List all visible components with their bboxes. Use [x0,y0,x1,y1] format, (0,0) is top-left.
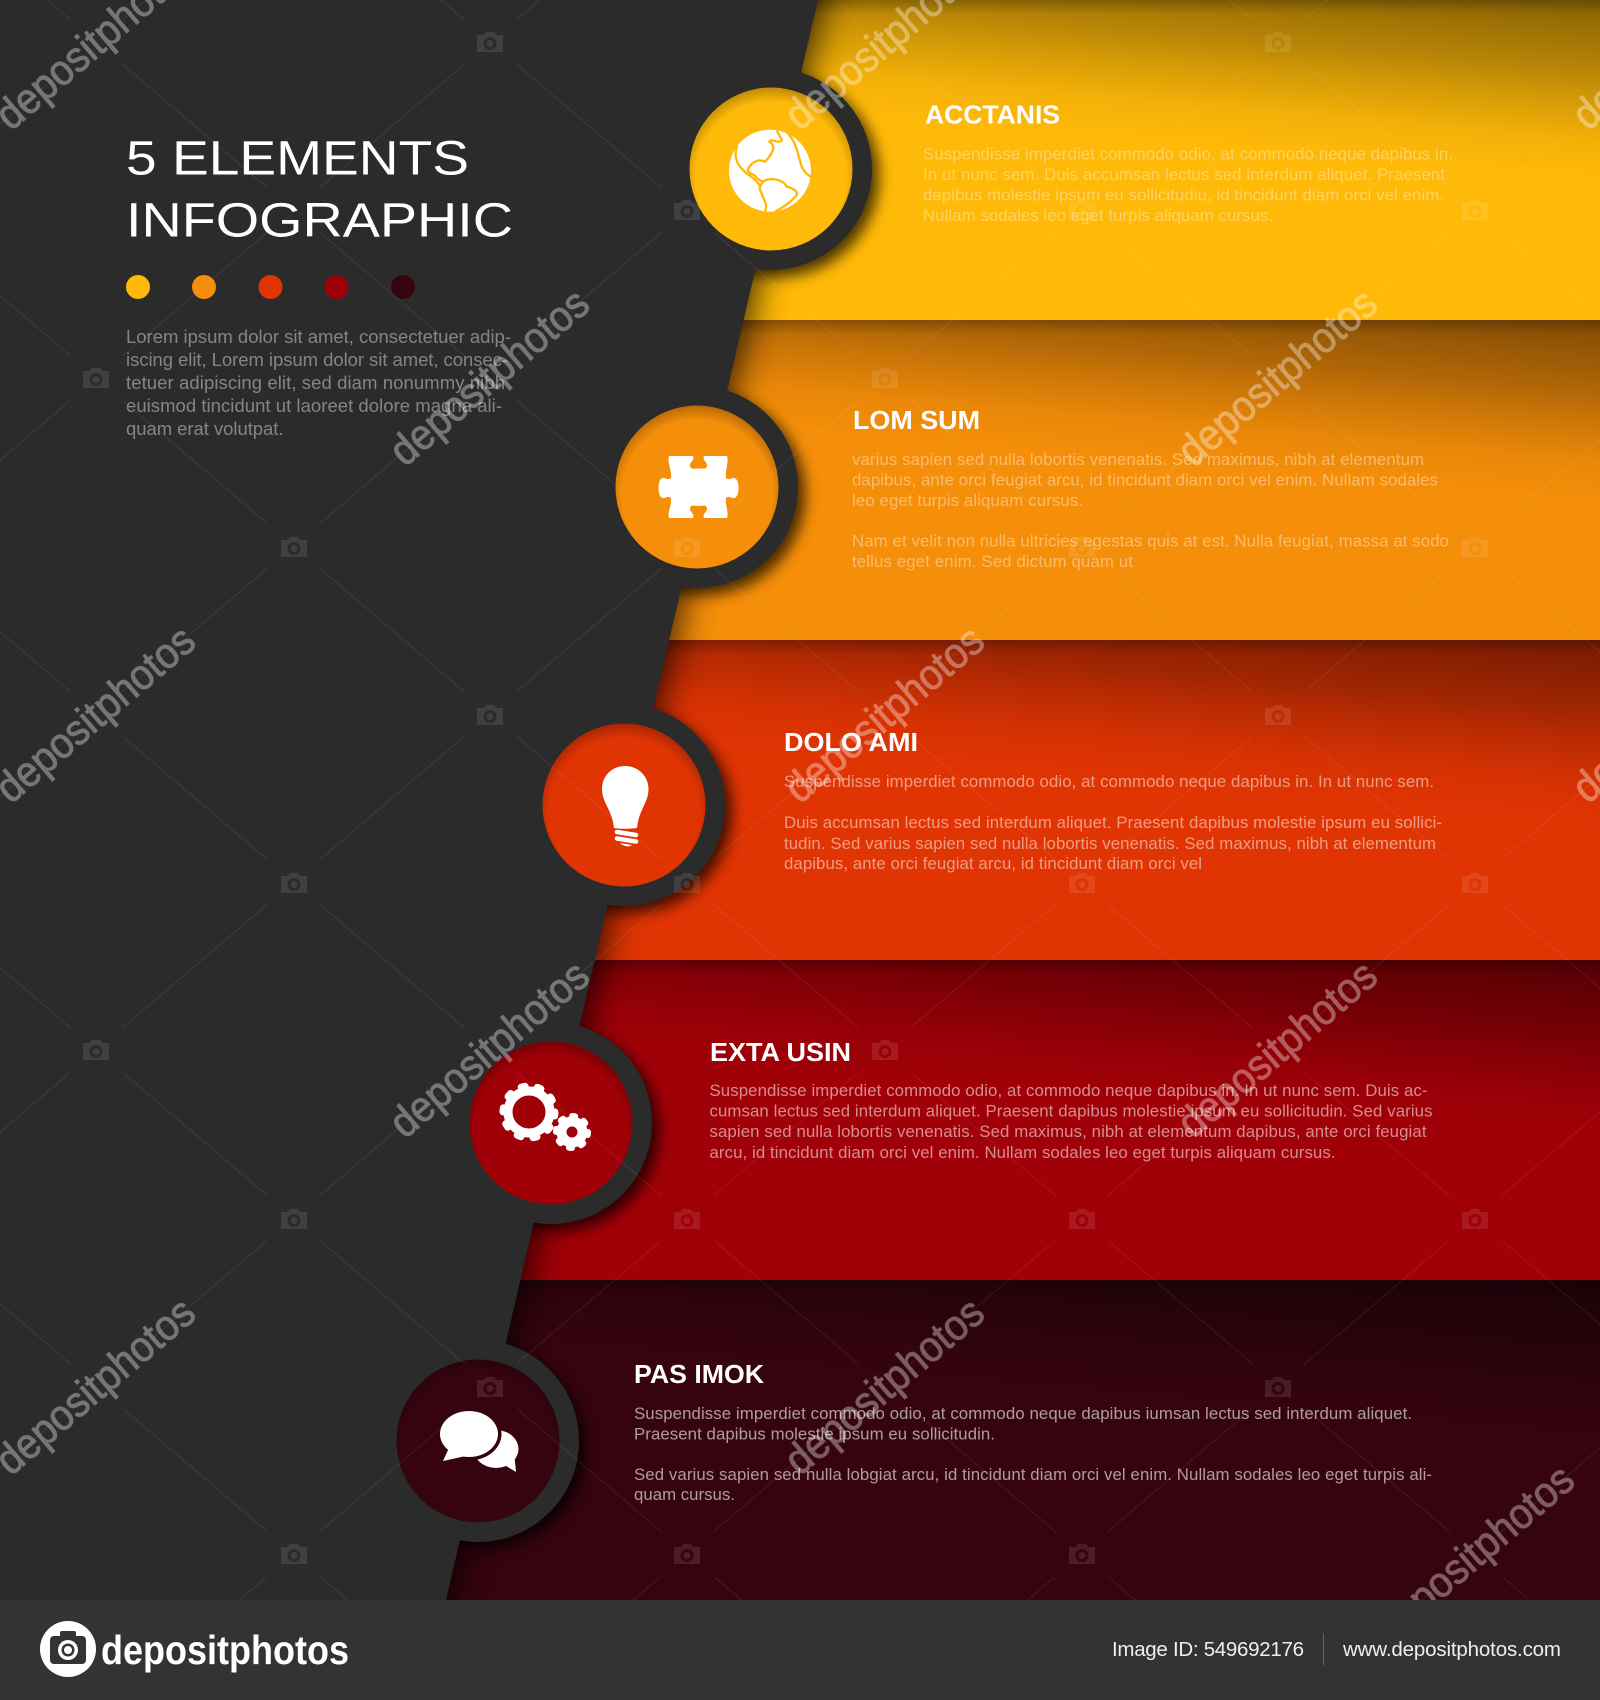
intro text: quam erat volutpat. [126,418,284,439]
footer website: www.depositphotos.com [1342,1638,1561,1661]
footer divider [1323,1633,1324,1665]
icon: light bulb [602,766,648,846]
text: dolo ami: DOLO AMI [784,729,918,757]
text: lom sum: Nam et velit non nulla ultricies egestas quis at est. Nulla feugiat, massa at sodo [852,532,1449,550]
panel: acctanis band [400,0,1600,320]
text: acctanis: dapibus molestie ipsum eu sollicitudiu, id tincidunt diam orci vel enim. [923,186,1444,204]
text: exta usin: Suspendisse imperdiet commodo odio, at commodo neque dapibus in. In ut nunc sem. Duis ac- [710,1081,1428,1100]
colour dots legend [126,275,415,299]
badge: pas imok chat [377,1340,586,1549]
text: pas imok: Praesent dapibus molestie ipsum eu sollicitudin. [634,1424,995,1444]
text: exta usin: arcu, id tincidunt diam orci vel enim. Nullam sodales leo eget turpis aliquam cursus. [710,1143,1336,1162]
text: lom sum: LOM SUM [853,407,980,435]
text: lom sum: varius sapien sed nulla lobortis venenatis. Sed maximus, nibh at elementum [852,450,1424,469]
badge: lom sum puzzle [596,386,805,595]
badge: acctanis globe [670,68,879,277]
text: lom sum: leo eget turpis aliquam cursus. [852,491,1083,510]
watermark text: depositphotos [380,279,598,475]
watermark camera icons [83,32,1488,1564]
intro text: Lorem ipsum dolor sit amet, consectetuer adip- [126,326,511,347]
icon: puzzle piece [658,456,738,518]
text: exta usin: cumsan lectus sed interdum aliquet. Praesent dapibus molestie ipsum eu sollicitudin. Sed varius [710,1102,1432,1120]
text: acctanis: ACCTANIS [925,102,1060,130]
text: pas imok: PAS IMOK [634,1361,765,1389]
watermark text: depositphotos [775,1288,993,1484]
text: pas imok: quam cursus. [634,1485,735,1504]
text: pas imok: Suspendisse imperdiet commodo odio, at commodo neque dapibus iumsan lectus sed interdum aliquet. [634,1404,1412,1423]
watermark text: depositphotos [775,616,993,812]
text: dolo ami: tudin. Sed varius sapien sed nulla lobortis venenatis. Sed maximus, nibh at elementum [784,834,1436,853]
badge: exta usin gears [450,1022,659,1231]
footer bar [0,1600,1600,1700]
footer image id: Image ID: 549692176 [1112,1638,1304,1661]
title [126,132,513,248]
dark panel shadow [0,0,833,1640]
icon: gears [503,1086,588,1148]
icon: globe [729,130,812,212]
badge: dolo ami bulb [523,704,732,913]
text: dolo ami [784,729,1442,873]
footer logo [40,1621,349,1677]
text: dolo ami: Suspendisse imperdiet commodo odio, at commodo neque dapibus in. In ut nunc sem. [784,772,1434,791]
text: dolo ami: dapibus, ante orci feugiat arcu, id tincidunt diam orci vel [784,854,1202,873]
watermark text: depositphotos [380,951,598,1147]
text: pas imok: Sed varius sapien sed nulla lobgiat arcu, id tincidunt diam orci vel enim. Nullam sodales leo eget turpis ali- [634,1465,1432,1484]
icon: camera logo [40,1621,96,1677]
title: INFOGRAPHIC [126,194,513,248]
intro text [126,326,511,439]
text: acctanis: Suspendisse imperdiet commodo odio, at commodo neque dapibus in. [923,144,1453,164]
text: exta usin: sapien sed nulla lobortis venenatis. Sed maximus, nibh at elementum dapibus, ante orci feugiat [710,1122,1427,1141]
panel: dolo ami band [400,640,1600,960]
watermark text: depositphotos [1365,1455,1583,1651]
text: pas imok [634,1361,1432,1504]
text: exta usin: EXTA USIN [710,1039,851,1067]
text: lom sum [852,407,1449,571]
icon: speech bubbles [436,1408,518,1472]
text: lom sum: tellus eget enim. Sed dictum quam ut [852,552,1133,571]
text: lom sum: dapibus, ante orci feugiat arcu, id tincidunt diam orci vel enim. Nullam sodales [852,470,1438,490]
dark left panel [0,0,818,1600]
title: 5 ELEMENTS [126,132,469,186]
text: acctanis: Nullam sodales leo eget turpis aliquam cursus. [923,206,1273,225]
watermark text: depositphotos [1168,279,1386,475]
text: acctanis: In ut nunc sem. Duis accumsan lectus sed interdum aliquet. Praesent [923,165,1445,184]
panel: exta usin band [400,960,1600,1280]
text: dolo ami: Duis accumsan lectus sed interdum aliquet. Praesent dapibus molestie ipsum eu sollici- [784,813,1442,832]
intro text: tetuer adipiscing elit, sed diam nonummy nibh [126,372,505,393]
panel: lom sum band [400,320,1600,640]
panel: pas imok band [400,1280,1600,1600]
watermark text: depositphotos [1168,951,1386,1147]
footer logo: depositphotos [101,1627,349,1673]
intro text: iscing elit, Lorem ipsum dolor sit amet, consec- [126,349,508,370]
intro text: euismod tincidunt ut laoreet dolore magna ali- [126,395,502,416]
text: exta usin [710,1039,1432,1162]
text: acctanis [923,102,1453,225]
